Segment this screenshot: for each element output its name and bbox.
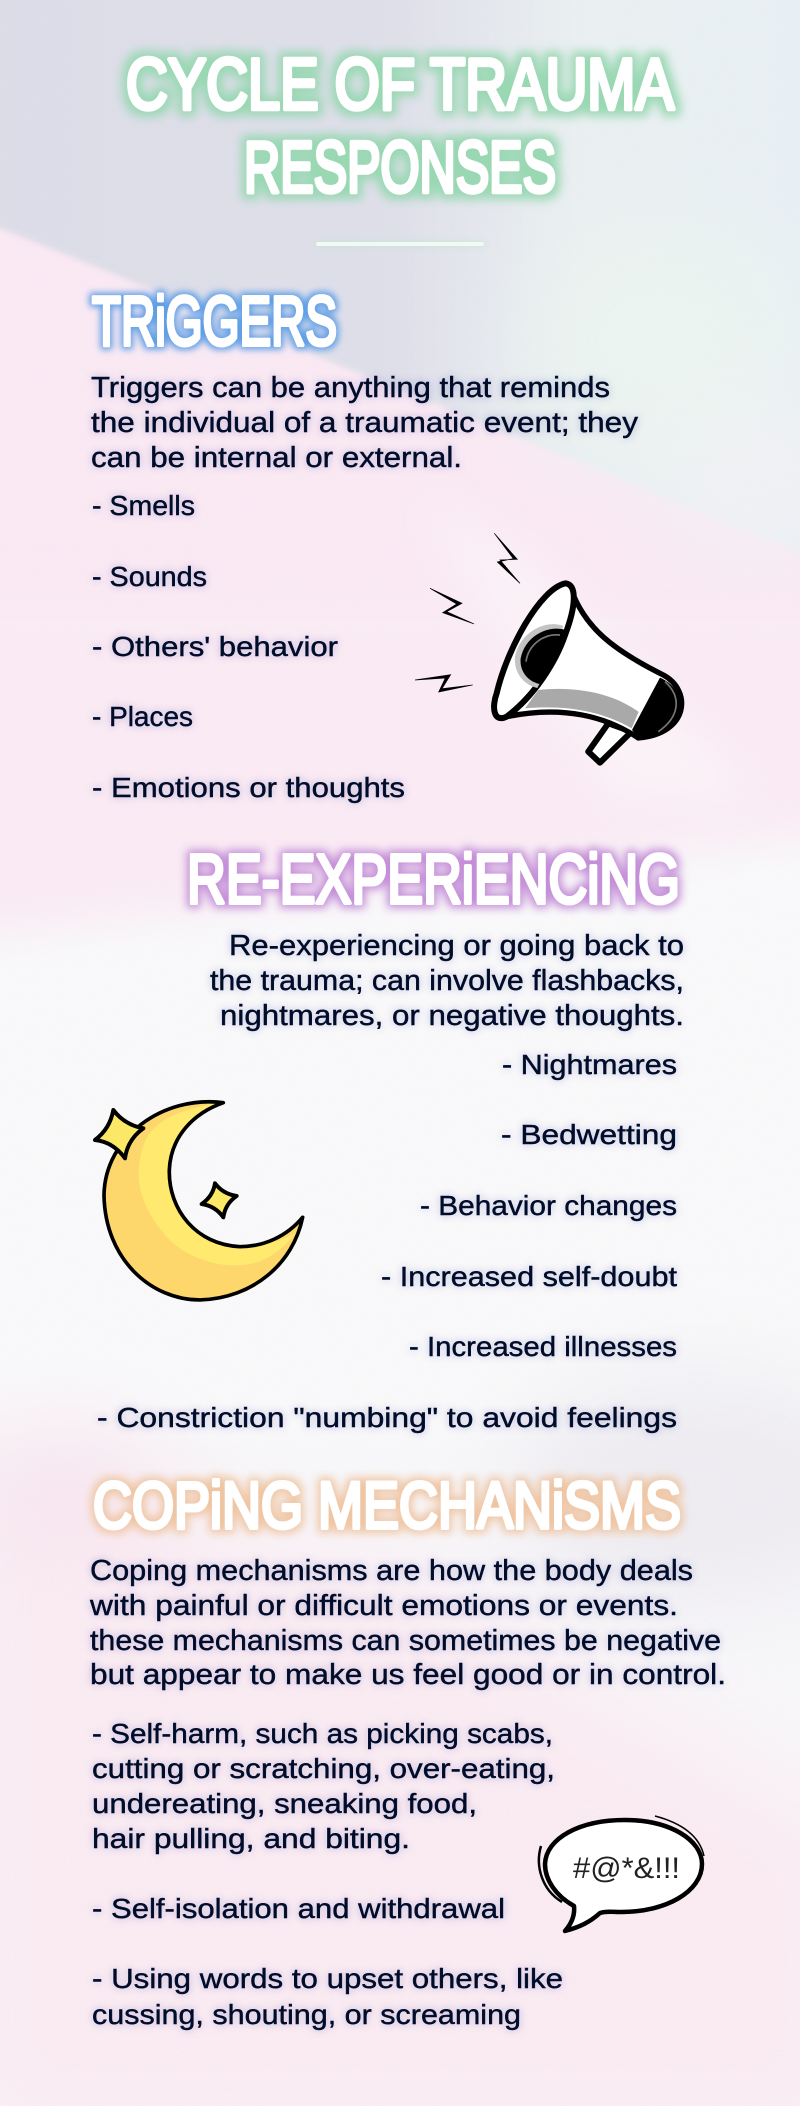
divider: [316, 242, 484, 246]
list: triggers: - Places: [92, 701, 193, 732]
icon: megaphone: [415, 533, 682, 763]
icon: moon with stars: [95, 1102, 303, 1300]
list: triggers: - Sounds: [92, 561, 207, 592]
text block: coping description: but appear to make us feel good or in control.: [90, 1659, 726, 1691]
list: coping mechanisms: cutting or scratching, over-eating,: [92, 1753, 555, 1784]
list: re-experiencing: - Bedwetting: [501, 1119, 677, 1150]
icon: speech bubble: #@*&!!!: [573, 1852, 680, 1885]
title: [126, 45, 674, 208]
text block: triggers description: the individual of a traumatic event; they: [91, 407, 639, 439]
text block: triggers description: [91, 372, 639, 474]
heading: coping mechanisms: COPiNG MECHANiSMS: [93, 1468, 681, 1542]
text block: re-experiencing description: [210, 930, 684, 1032]
list: re-experiencing: - Nightmares: [502, 1049, 677, 1080]
list: coping mechanisms: cussing, shouting, or screaming: [92, 1999, 521, 2030]
list: triggers: [92, 490, 405, 803]
list: re-experiencing: - Increased illnesses: [409, 1331, 677, 1362]
list: re-experiencing: - Constriction "numbing" to avoid feelings: [97, 1402, 677, 1433]
text block: coping description: these mechanisms can sometimes be negative: [90, 1625, 721, 1657]
list: triggers: - Emotions or thoughts: [92, 772, 405, 803]
text block: triggers description: Triggers can be anything that reminds: [91, 372, 610, 404]
list: coping mechanisms: - Self-harm, such as picking scabs,: [92, 1718, 553, 1749]
text block: coping description: Coping mechanisms are how the body deals: [90, 1555, 693, 1587]
list: coping mechanisms: [92, 1718, 563, 2030]
list: coping mechanisms: - Self-isolation and withdrawal: [92, 1893, 505, 1924]
text block: coping description: with painful or difficult emotions or events.: [89, 1590, 678, 1622]
text block: re-experiencing description: Re-experiencing or going back to: [229, 930, 684, 962]
list: re-experiencing: - Behavior changes: [420, 1190, 677, 1221]
list: coping mechanisms: undereating, sneaking food,: [92, 1788, 477, 1819]
icon: speech bubble: [539, 1816, 704, 1931]
list: re-experiencing: - Increased self-doubt: [381, 1261, 677, 1292]
list: triggers: - Smells: [92, 490, 195, 521]
text block: re-experiencing description: nightmares, or negative thoughts.: [220, 1000, 684, 1032]
list: re-experiencing: [97, 1049, 677, 1433]
text block: triggers description: can be internal or external.: [91, 442, 462, 474]
heading: triggers: TRiGGERS: [92, 282, 337, 360]
list: triggers: - Others' behavior: [92, 631, 338, 662]
title: RESPONSES: [244, 128, 556, 208]
text block: coping description: [89, 1555, 726, 1691]
text block: re-experiencing description: the trauma; can involve flashbacks,: [210, 965, 684, 997]
list: coping mechanisms: - Using words to upset others, like: [92, 1963, 563, 1994]
list: coping mechanisms: hair pulling, and biting.: [92, 1823, 410, 1854]
title: CYCLE OF TRAUMA: [126, 45, 674, 125]
